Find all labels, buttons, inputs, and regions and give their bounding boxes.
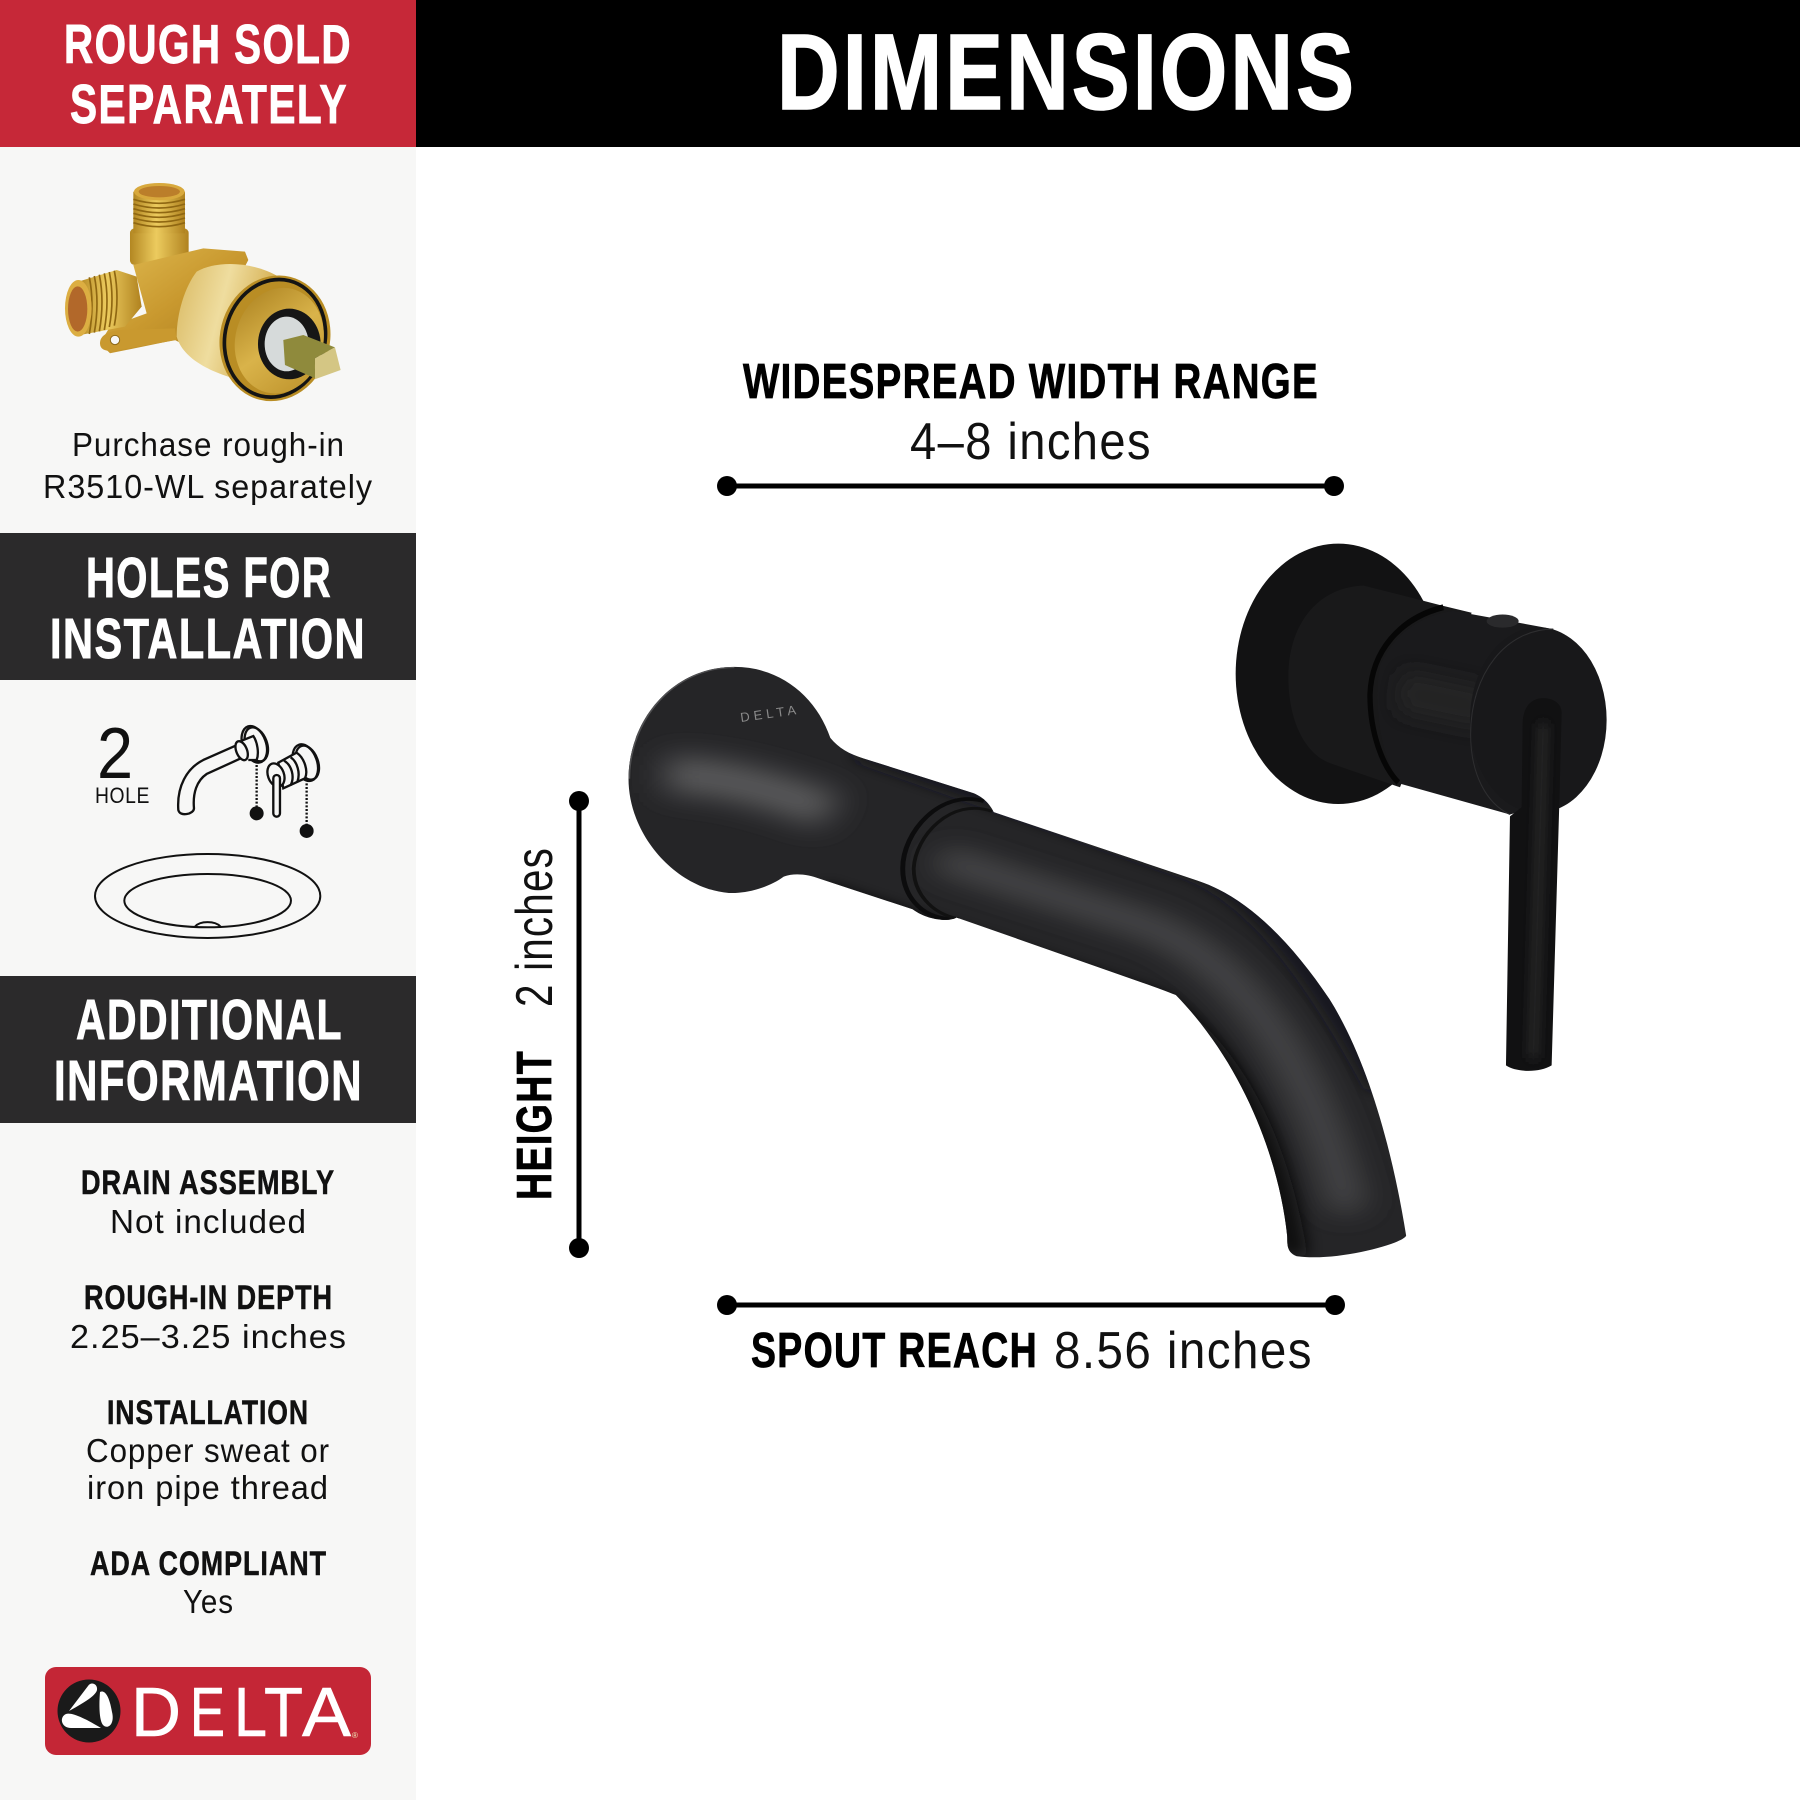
- dimension: spout reach: SPOUT REACH: [751, 1324, 1038, 1378]
- valve stem: [283, 335, 341, 379]
- value: 4–8 inches: [910, 413, 1152, 471]
- product: wall spout: [629, 667, 1406, 1257]
- logo mark: [58, 1680, 120, 1742]
- info: rough-in depth: 2.25–3.25 inches: [70, 1318, 347, 1355]
- panel: rough sold separately banner: [0, 0, 416, 147]
- valve pale cylinder: [177, 264, 278, 380]
- valve left pipe: [65, 270, 142, 337]
- panel heading: holes for installation: HOLES FOR: [86, 546, 332, 610]
- heading: rough sold: ROUGH SOLD: [64, 13, 352, 75]
- info: drain assembly: DRAIN ASSEMBLY: [81, 1164, 335, 1202]
- valve front ring: [206, 264, 344, 413]
- spout collar: [903, 799, 984, 919]
- logo: delta: ®: [352, 1731, 358, 1740]
- panel heading: holes for installation: INSTALLATION: [50, 607, 366, 671]
- panel heading: holes for installation: [0, 533, 416, 680]
- logo wordmark: A: [302, 1673, 351, 1751]
- sidebar panel background: [0, 0, 416, 1800]
- logo wordmark: L: [234, 1673, 267, 1751]
- value: 2 inches: [506, 847, 564, 1007]
- info: rough-in depth: [70, 1279, 347, 1355]
- dotted hole markers: [257, 765, 307, 825]
- info: rough-in depth: ROUGH-IN DEPTH: [84, 1279, 333, 1317]
- logo wordmark: T: [264, 1673, 303, 1751]
- icon: faucet line drawing: [178, 722, 323, 838]
- spout logo imprint: DELTA: [739, 702, 797, 725]
- icon: two hole label: 2: [97, 714, 135, 794]
- dimension: widespread width range: [717, 355, 1344, 496]
- panel heading: additional information: INFORMATION: [54, 1049, 363, 1113]
- dimension: widespread width range: WIDESPREAD WIDTH RANGE: [743, 355, 1319, 409]
- info: ada compliant: ADA COMPLIANT: [90, 1545, 327, 1583]
- icon: brass rough-in valve: [65, 183, 344, 413]
- spout rim: [629, 667, 734, 779]
- icon: two hole label: [95, 714, 150, 808]
- lever: [1506, 698, 1562, 1071]
- info: installation: INSTALLATION: [107, 1394, 309, 1432]
- valve top pipe: [130, 183, 189, 265]
- heading: separately: SEPARATELY: [70, 73, 348, 135]
- caption: purchase rough-in: Purchase rough-in: [72, 426, 345, 463]
- end cap: [1470, 627, 1607, 813]
- info: installation: iron pipe thread: [87, 1469, 329, 1506]
- width dimension line: [717, 476, 1344, 496]
- icon: two hole label: HOLE: [95, 783, 150, 808]
- handle hub: [1288, 585, 1472, 787]
- indicator button: [1487, 615, 1519, 628]
- title banner: dimensions: [416, 0, 1800, 147]
- flange highlight: [666, 775, 830, 811]
- barrel highlight: [1400, 691, 1487, 709]
- hole dots: [250, 806, 314, 838]
- info: ada compliant: Yes: [183, 1583, 234, 1620]
- groove: [1370, 607, 1443, 783]
- icon: sink basin outline: [95, 854, 320, 938]
- handle barrel: [1377, 611, 1553, 815]
- dimension: height: HEIGHT: [508, 1050, 562, 1200]
- info: drain assembly: [81, 1164, 335, 1240]
- caption: purchase rough-in: R3510-WL separately: [43, 468, 373, 505]
- spout top shadow: [858, 752, 1379, 1089]
- info: drain assembly: Not included: [110, 1203, 307, 1240]
- caption: purchase rough-in: [43, 426, 373, 505]
- logo wordmark: [131, 1673, 351, 1751]
- valve mounting flange: [100, 328, 177, 351]
- dimension: spout reach: [717, 1295, 1345, 1380]
- value: 8.56 inches: [1054, 1322, 1313, 1380]
- info: installation: Copper sweat or: [86, 1432, 330, 1469]
- logo wordmark: E: [190, 1673, 225, 1751]
- panel heading: additional information: ADDITIONAL: [76, 988, 343, 1052]
- height dimension line: [569, 791, 589, 1258]
- dimension: height: [506, 791, 589, 1258]
- info: ada compliant: [90, 1545, 327, 1620]
- title: DIMENSIONS: [777, 11, 1357, 132]
- product: lever handle: [1236, 544, 1607, 1071]
- spout highlight: [940, 858, 1349, 1211]
- spout shadow: [819, 893, 1294, 1256]
- reach dimension line: [717, 1295, 1345, 1315]
- escutcheon plate: [1236, 544, 1441, 804]
- logo wordmark: D: [131, 1673, 181, 1751]
- lever highlight: [1533, 724, 1543, 1058]
- logo: delta: [45, 1667, 371, 1755]
- valve body: [100, 248, 248, 353]
- panel heading: additional information: [0, 976, 416, 1123]
- info: installation: [86, 1394, 330, 1506]
- cap edge: [1471, 629, 1553, 815]
